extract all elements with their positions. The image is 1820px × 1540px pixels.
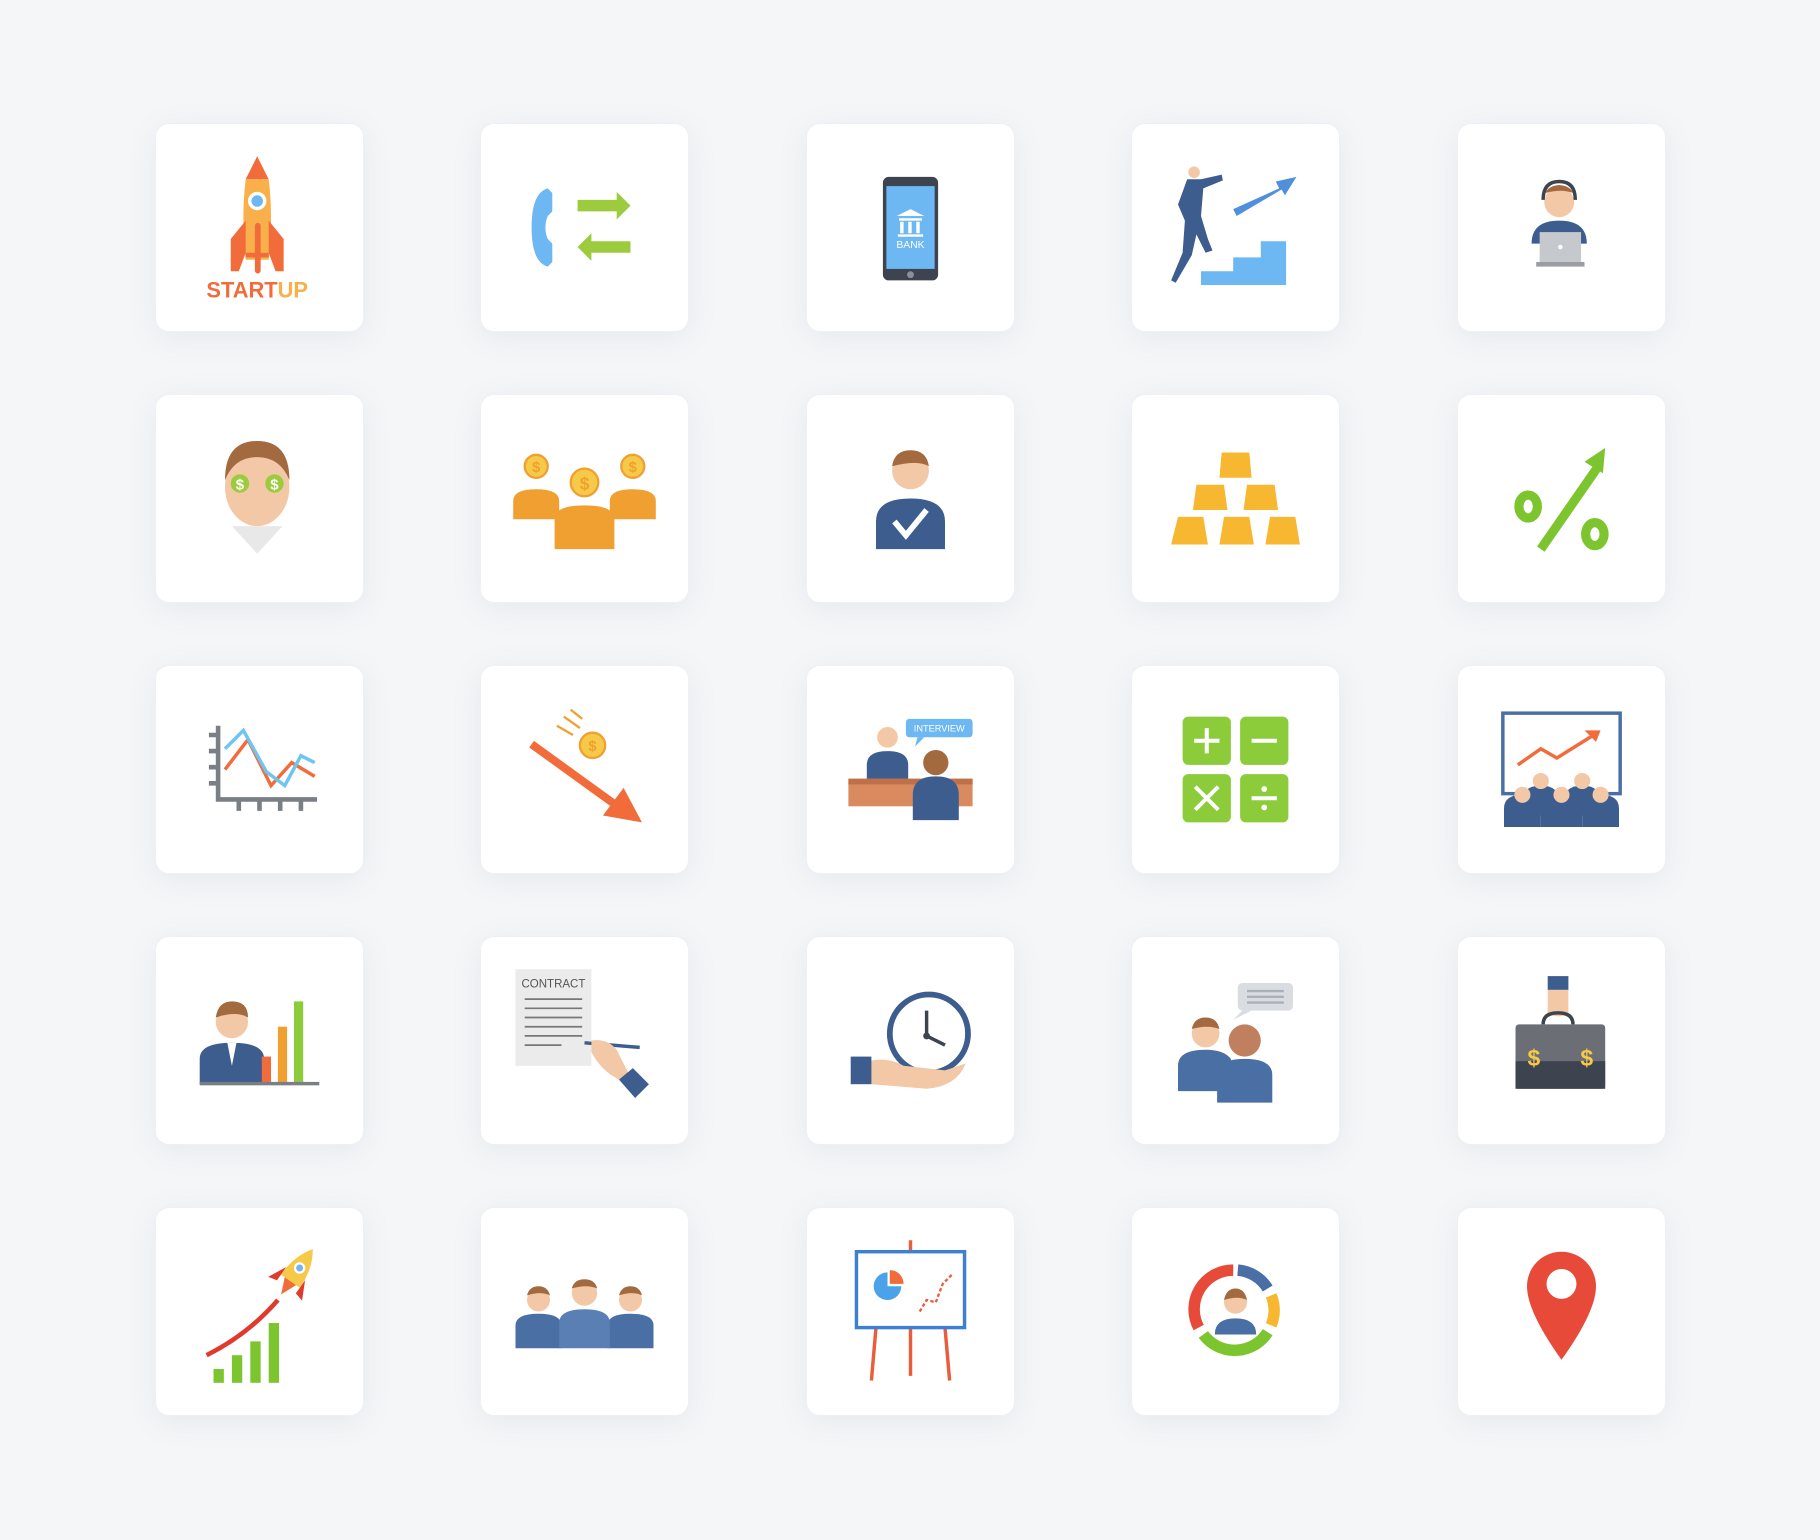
card: businessman with chart bbox=[155, 936, 364, 1145]
icon: arrow up bbox=[1233, 177, 1296, 216]
card: falling money bbox=[480, 665, 689, 874]
icon: briefcase with hand: $ bbox=[1528, 1045, 1541, 1071]
card: interview bbox=[806, 665, 1015, 874]
card: team money bbox=[480, 394, 689, 603]
icon: arrows bbox=[578, 192, 630, 261]
card: team money: $ bbox=[580, 473, 590, 493]
icon: man and bar chart bbox=[200, 1001, 319, 1085]
card: rocket growth bbox=[155, 1207, 364, 1416]
icon: dollar eyes face: $ bbox=[270, 476, 279, 493]
icon: phone bbox=[532, 188, 552, 267]
icon: person in donut bbox=[1194, 1270, 1274, 1350]
icon: bank phone: BANK bbox=[896, 240, 925, 251]
icon: briefcase with hand: $ bbox=[1580, 1045, 1593, 1071]
icon: contract signing: CONTRACT bbox=[522, 979, 585, 991]
card: calculator bbox=[1131, 665, 1340, 874]
card: team money: $ bbox=[629, 459, 638, 476]
card: team money: $ bbox=[532, 459, 541, 476]
icon: stairs bbox=[1201, 241, 1286, 285]
icon: percent arrow bbox=[1519, 466, 1604, 549]
card: money briefcase bbox=[1457, 936, 1666, 1145]
card: support agent bbox=[1457, 123, 1666, 332]
icon: person with check bbox=[876, 450, 945, 549]
card: presentation audience bbox=[1457, 665, 1666, 874]
icon: map pin bbox=[1527, 1252, 1596, 1360]
card: location pin bbox=[1457, 1207, 1666, 1416]
card: startup rocket bbox=[155, 123, 364, 332]
icon: growth bars with rocket bbox=[214, 1323, 279, 1383]
icon: interview scene bbox=[848, 719, 973, 820]
icon: two people talking bbox=[1178, 983, 1293, 1103]
icon: interview scene: INTERVIEW bbox=[914, 724, 965, 734]
icon: line chart bbox=[209, 726, 317, 811]
icon: dollar eyes face: $ bbox=[236, 476, 245, 493]
card: phone transfer bbox=[480, 123, 689, 332]
icon: three businessmen bbox=[516, 1279, 654, 1348]
card: discussion bbox=[1131, 936, 1340, 1145]
text: STARTUP: STARTUP bbox=[206, 278, 308, 303]
card: money-minded man bbox=[155, 394, 364, 603]
icon: briefcase with hand bbox=[1516, 976, 1605, 1089]
card: percent growth bbox=[1457, 394, 1666, 603]
card: contract bbox=[480, 936, 689, 1145]
card: presentation easel bbox=[806, 1207, 1015, 1416]
icon: down arrow with coin bbox=[532, 744, 614, 804]
icon: rocket bbox=[231, 156, 284, 274]
card: target person bbox=[1131, 1207, 1340, 1416]
icon: dollar eyes face bbox=[225, 441, 289, 554]
card: line chart bbox=[155, 665, 364, 874]
icon: contract signing bbox=[516, 969, 649, 1098]
card: team bbox=[480, 1207, 689, 1416]
icon: agent with laptop bbox=[1532, 182, 1587, 267]
icon: easel with charts bbox=[856, 1240, 965, 1380]
icon: bank phone bbox=[883, 177, 938, 280]
card: time in hand bbox=[806, 936, 1015, 1145]
card: mobile bank bbox=[806, 123, 1015, 332]
icon: three people with coins bbox=[513, 489, 656, 549]
card: career stairs bbox=[1131, 123, 1340, 332]
card: falling money: $ bbox=[588, 738, 597, 755]
card: approved person bbox=[806, 394, 1015, 603]
icon: clock on hand bbox=[851, 994, 968, 1089]
icon: board with audience bbox=[1503, 713, 1620, 827]
icon: gold bars bbox=[1171, 452, 1300, 544]
icon: climbing man bbox=[1171, 167, 1223, 283]
icon: math operations bbox=[1183, 717, 1288, 822]
card: gold bars bbox=[1131, 394, 1340, 603]
